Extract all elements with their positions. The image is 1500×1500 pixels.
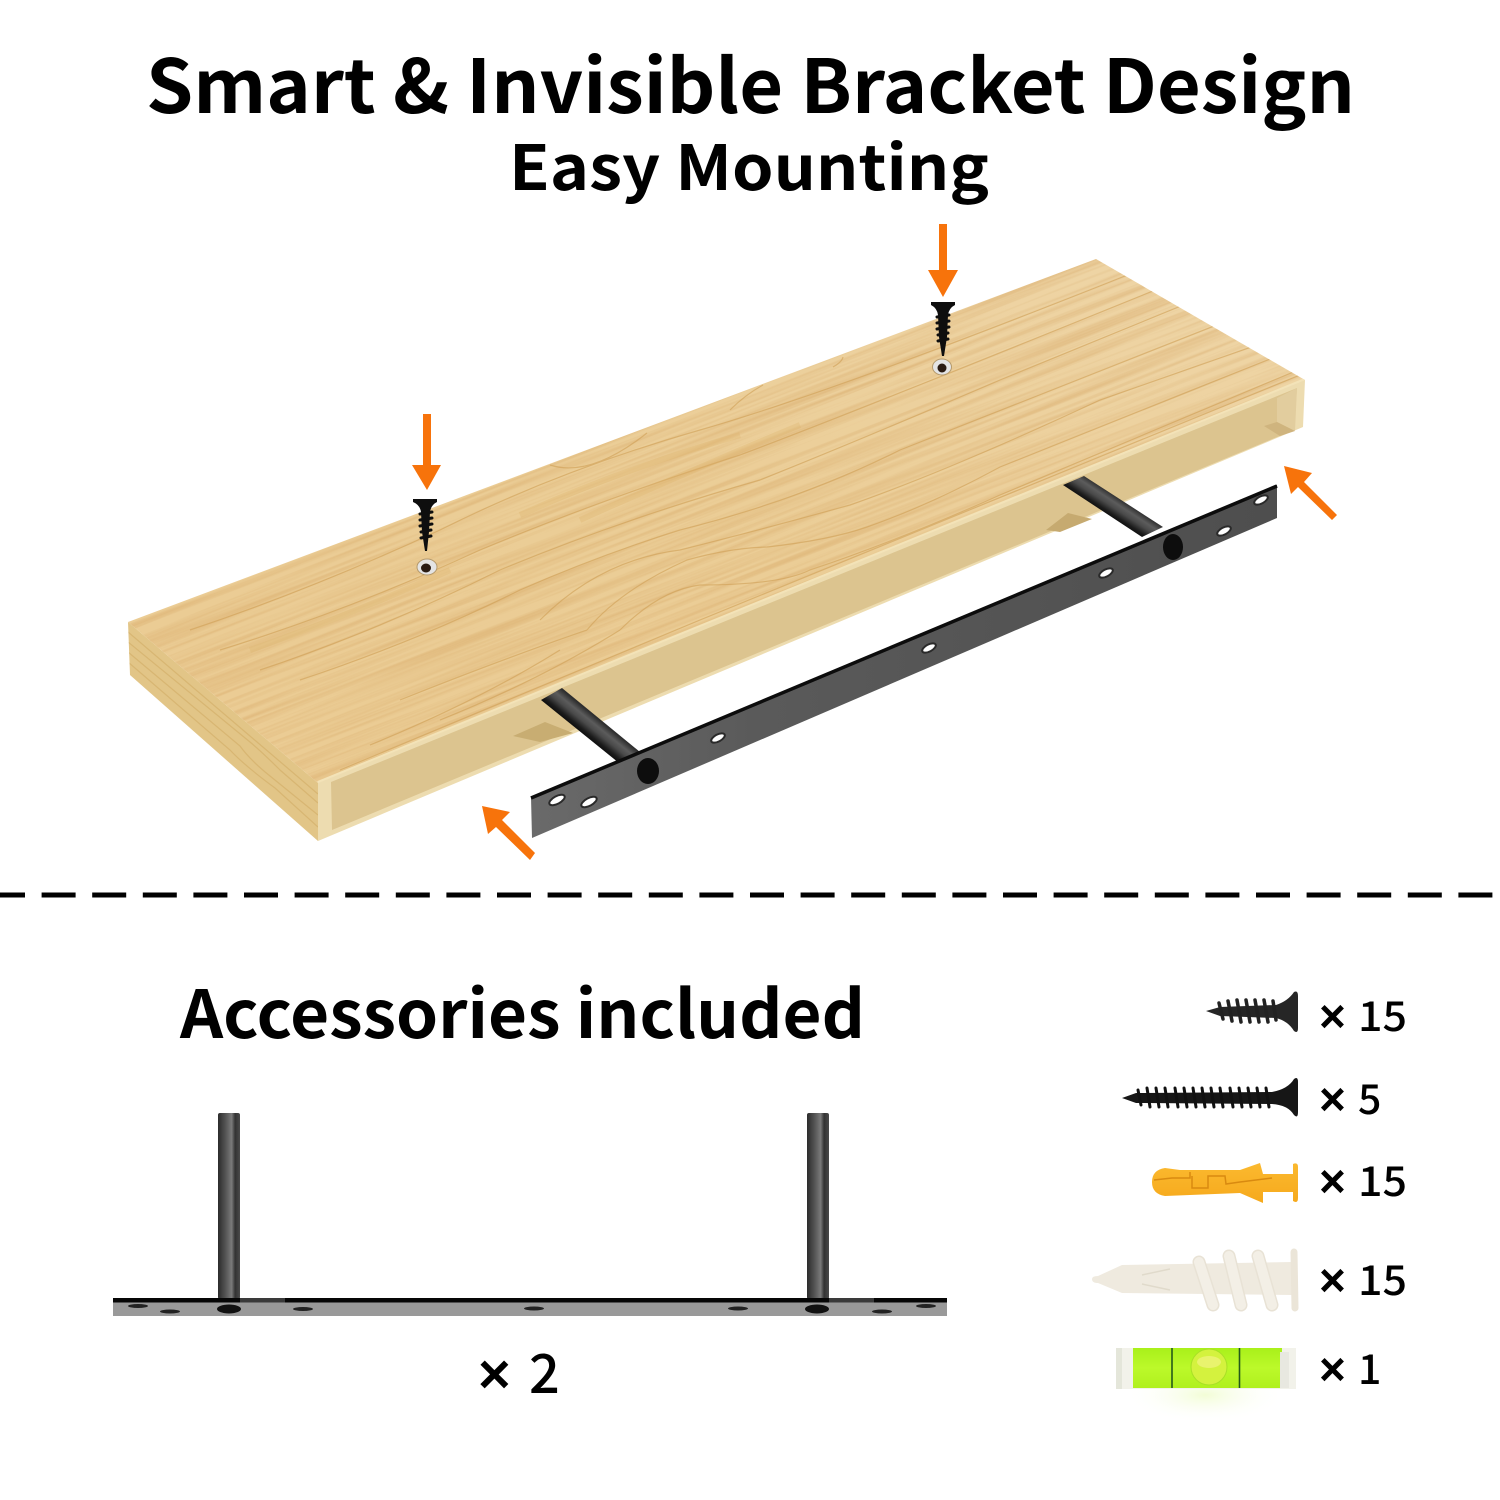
icon: orange wall anchor <box>1152 1163 1298 1203</box>
bracket quantity: 2 <box>529 1330 560 1409</box>
quantity long screw: × <box>1319 1073 1346 1125</box>
quantity white anchor: × <box>1319 1254 1346 1306</box>
arrow: down right screw <box>928 224 958 297</box>
icon: white drywall anchor <box>1092 1252 1295 1308</box>
quantity orange anchor: × <box>1319 1155 1346 1207</box>
hole in shelf right <box>932 359 952 375</box>
shelf top wood face <box>128 259 1305 783</box>
wall bracket plate <box>531 485 1277 838</box>
shelf left side <box>128 622 318 841</box>
arrow: bracket right <box>1284 466 1337 520</box>
bracket quantity <box>478 1330 560 1409</box>
rear rod right <box>1063 476 1163 537</box>
rod left <box>218 1113 240 1299</box>
icon: left shelf screw <box>413 499 437 551</box>
quantity orange anchor <box>1319 1148 1407 1208</box>
icon: short screw <box>1206 992 1298 1032</box>
quantity level <box>1319 1336 1381 1396</box>
quantity level: × <box>1319 1343 1346 1395</box>
hole in shelf left <box>417 559 437 575</box>
quantity long screw <box>1319 1066 1381 1126</box>
rear rod left <box>541 688 640 763</box>
quantity short screw <box>1319 983 1407 1043</box>
quantity long screw: 5 <box>1358 1066 1381 1126</box>
subtitle: Easy Mounting <box>509 118 989 208</box>
quantity level: 1 <box>1358 1336 1381 1396</box>
quantity orange anchor: 15 <box>1358 1148 1407 1208</box>
bracket quantity: × <box>478 1342 511 1405</box>
icon: right shelf screw <box>931 302 955 356</box>
quantity white anchor <box>1319 1247 1407 1307</box>
rod right <box>807 1113 829 1299</box>
floating shelf <box>128 259 1305 841</box>
arrow: down left screw <box>412 414 441 490</box>
quantity short screw: × <box>1319 990 1346 1042</box>
arrow: bracket left <box>482 806 535 860</box>
quantity short screw: 15 <box>1358 983 1407 1043</box>
divider <box>0 892 1500 898</box>
quantity white anchor: 15 <box>1358 1247 1407 1307</box>
plate <box>113 1298 947 1316</box>
accessories heading: Accessories included <box>179 962 865 1058</box>
bracket accessory <box>113 1113 947 1316</box>
shelf front opening <box>318 380 1305 841</box>
icon: long screw <box>1122 1078 1298 1116</box>
title: Smart & Invisible Bracket Design <box>146 28 1355 135</box>
icon: bubble level <box>1116 1348 1296 1423</box>
